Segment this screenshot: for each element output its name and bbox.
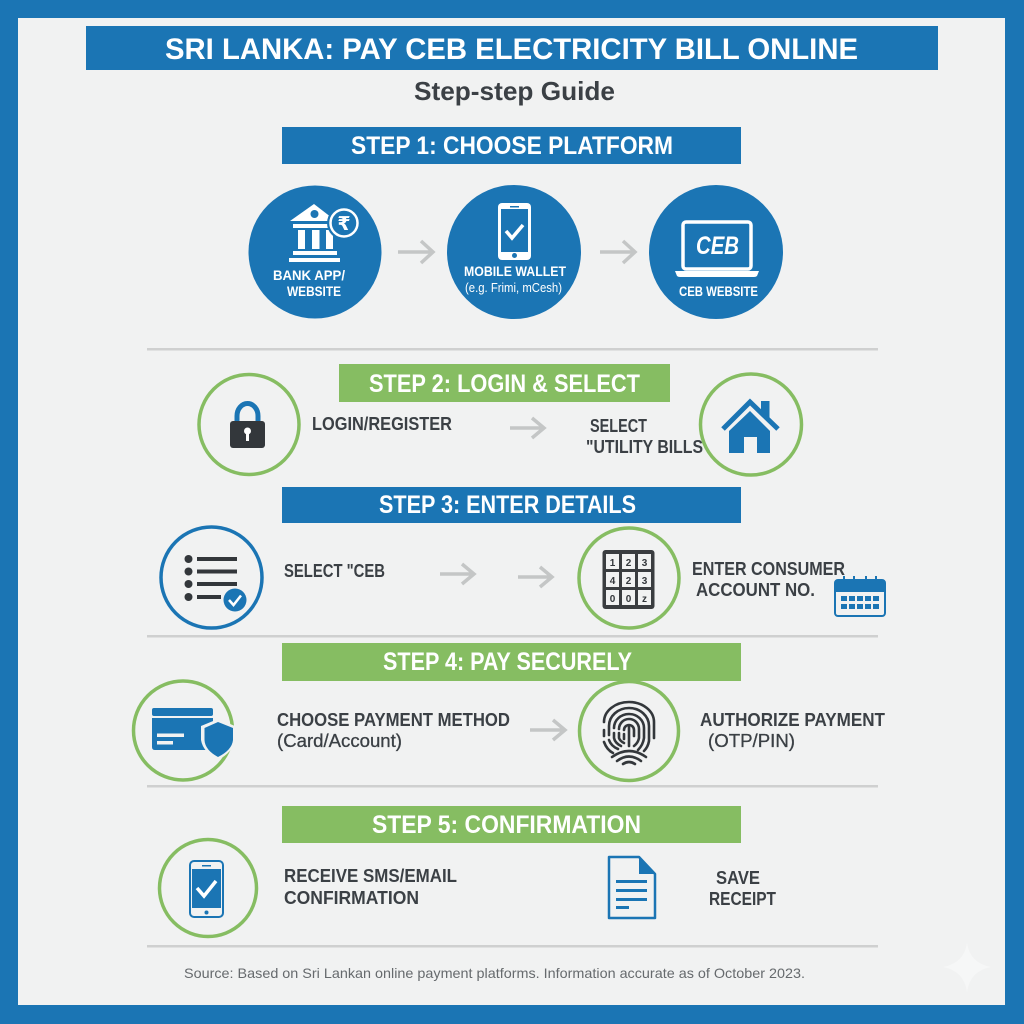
divider	[147, 635, 878, 638]
heading: step 5	[282, 806, 741, 843]
icon: mobile wallet circle: MOBILE WALLET	[464, 263, 566, 279]
arrow	[440, 564, 474, 584]
arrow	[398, 241, 433, 263]
text: authorize payment	[700, 709, 886, 751]
icon: document	[609, 857, 655, 918]
text: choose payment method	[277, 709, 510, 751]
icon: bank app circle	[248, 186, 382, 318]
heading: step 3	[282, 487, 741, 523]
text: receive confirmation	[284, 865, 457, 908]
heading: step 1: STEP 1: CHOOSE PLATFORM	[351, 132, 673, 160]
icon: fingerprint	[580, 682, 678, 780]
icon: calendar	[835, 576, 885, 616]
heading: step 4	[282, 643, 741, 681]
icon: keypad: 2	[626, 558, 632, 569]
subtitle: Step-step Guide	[414, 76, 615, 106]
arrow	[530, 720, 565, 740]
icon: lock	[199, 374, 299, 474]
text: enter consumer account no: ACCOUNT NO.	[696, 579, 815, 600]
source note: Source: Based on Sri Lankan online payment platforms. Information accurate as of October 2023.	[184, 965, 805, 981]
text: receive confirmation: RECEIVE SMS/EMAIL	[284, 865, 457, 886]
icon: house	[700, 374, 802, 475]
heading: step 1	[282, 127, 741, 164]
heading: step 5: STEP 5: CONFIRMATION	[372, 811, 641, 839]
divider	[147, 945, 878, 948]
title	[86, 26, 938, 70]
icon: keypad: z	[642, 594, 647, 605]
icon: mobile wallet circle: (e.g. Frimi, mCesh)	[465, 280, 562, 295]
icon: keypad: 2	[626, 576, 632, 587]
title: SRI LANKA: PAY CEB ELECTRICITY BILL ONLINE	[165, 33, 858, 66]
heading: step 2	[339, 364, 670, 402]
text: authorize payment: AUTHORIZE PAYMENT	[700, 709, 886, 730]
text: enter consumer account no	[692, 558, 845, 600]
icon: CEB website circle: CEB	[696, 232, 739, 260]
text: select utility bills: SELECT	[590, 415, 648, 436]
icon: phone confirmation	[160, 840, 256, 936]
icon: sparkle	[943, 943, 991, 992]
text: enter consumer account no: ENTER CONSUMER	[692, 558, 845, 579]
text: authorize payment: (OTP/PIN)	[708, 730, 795, 751]
text: select CEB: SELECT "CEB	[284, 560, 385, 581]
arrow	[600, 241, 635, 263]
heading: step 4: STEP 4: PAY SECURELY	[383, 648, 632, 676]
icon: checklist	[161, 527, 262, 628]
icon: keypad	[579, 528, 679, 628]
icon: bank app circle: BANK APP/	[273, 267, 345, 283]
text: save receipt: SAVE	[716, 867, 760, 888]
icon: CEB website circle	[649, 185, 783, 319]
text: save receipt	[709, 867, 777, 909]
text: choose payment method: CHOOSE PAYMENT METHOD	[277, 709, 510, 730]
divider	[147, 348, 878, 350]
icon: keypad: 0	[626, 594, 632, 605]
text: receive confirmation: CONFIRMATION	[284, 887, 419, 908]
arrow	[518, 567, 552, 587]
icon: keypad: 1	[610, 558, 616, 569]
icon: keypad: 0	[610, 594, 616, 605]
icon: bank app circle: WEBSITE	[287, 283, 341, 299]
text: login/register: LOGIN/REGISTER	[312, 413, 452, 434]
text: select utility bills	[586, 415, 703, 457]
text: select utility bills: "UTILITY BILLS	[586, 436, 703, 457]
icon: keypad: 3	[642, 576, 648, 587]
icon: keypad: 4	[610, 576, 616, 587]
heading: step 3: STEP 3: ENTER DETAILS	[379, 491, 636, 519]
text: save receipt: RECEIPT	[709, 888, 777, 909]
icon: card and shield	[134, 681, 235, 780]
icon: keypad: 3	[642, 558, 648, 569]
text: choose payment method: (Card/Account)	[277, 730, 402, 751]
divider	[147, 785, 878, 788]
heading: step 2: STEP 2: LOGIN & SELECT	[369, 370, 640, 398]
icon: CEB website circle: CEB WEBSITE	[679, 283, 758, 299]
icon: bank app circle: ₹	[337, 213, 351, 235]
arrow	[510, 418, 544, 438]
icon: mobile wallet circle	[447, 185, 581, 319]
